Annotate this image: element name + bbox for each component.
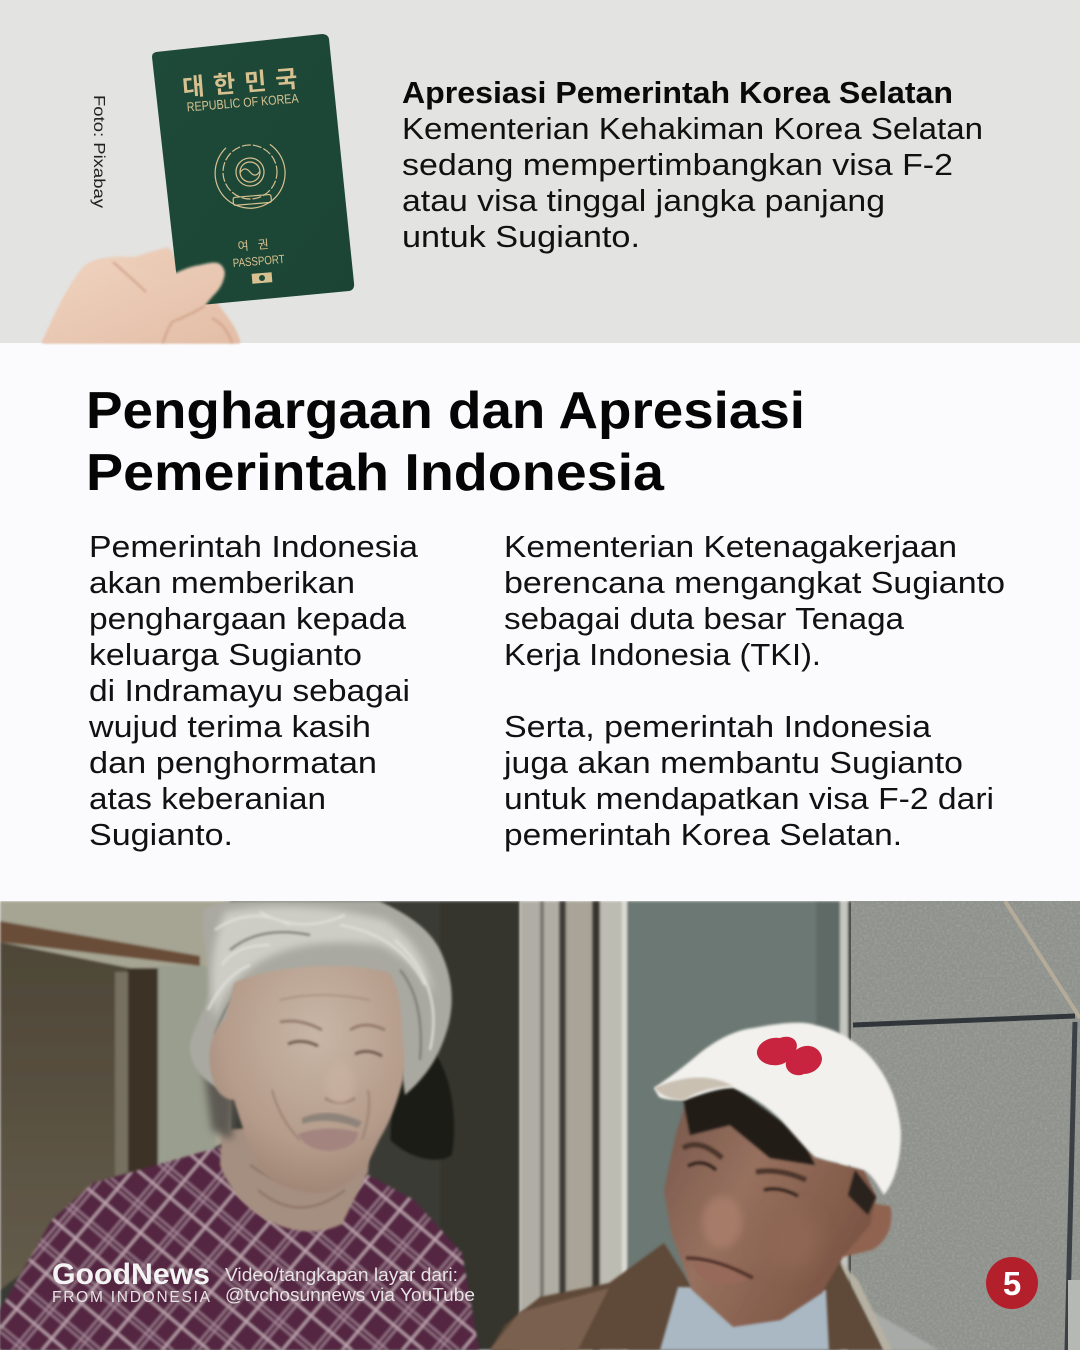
passport gold lettering	[181, 65, 307, 284]
text block: Korean government appreciation: untuk Sugianto.	[402, 219, 640, 254]
passport gold lettering: 여권	[237, 236, 278, 254]
text block: Korean government appreciation: atau visa tinggal jangka panjang	[402, 183, 885, 218]
text block: Korean government appreciation: sedang mempertimbangkan visa F-2	[402, 147, 953, 182]
logo: GoodNews from Indonesia: FROM INDONESIA	[52, 1289, 211, 1306]
hand fingers behind passport	[42, 247, 240, 343]
video credit: @tvchosunnews via YouTube	[225, 1285, 475, 1305]
lips	[712, 1264, 740, 1278]
face	[664, 1090, 876, 1327]
page number badge	[986, 1257, 1038, 1309]
video credit	[225, 1265, 475, 1305]
thumb and palm	[42, 260, 240, 343]
ear	[843, 1203, 891, 1257]
text block: right column: Kementerian Ketenagakerjaan	[504, 529, 957, 564]
woman	[0, 901, 479, 1350]
dark hair by the ear	[200, 1076, 237, 1142]
clover logo	[757, 1037, 822, 1075]
passport gold lettering: REPUBLIC OF KOREA	[186, 91, 299, 114]
text block: left column: keluarga Sugianto	[89, 637, 362, 672]
text block: right column: juga akan membantu Sugianto	[503, 745, 963, 780]
man	[490, 1023, 939, 1350]
shirt	[0, 1147, 479, 1350]
cap	[654, 1023, 901, 1195]
text block: Korean government appreciation: Apresiasi Pemerintah Korea Selatan	[402, 75, 953, 110]
text block: Korean government appreciation	[402, 75, 983, 254]
hair under cap	[683, 1086, 815, 1165]
text block: right column: berencana mengangkat Sugianto	[504, 565, 1005, 600]
text block: right column: sebagai duta besar Tenaga	[504, 601, 905, 636]
eyes, brows and mouth	[683, 1145, 806, 1278]
passport cover	[152, 34, 354, 307]
text block: Korean government appreciation: Kementerian Kehakiman Korea Selatan	[402, 111, 983, 146]
text block: right column: Kerja Indonesia (TKI).	[504, 637, 821, 672]
text block: right column: Serta, pemerintah Indonesia	[504, 709, 932, 744]
hair	[190, 901, 452, 1095]
text block: right column: untuk mendapatkan visa F-2 dari	[504, 781, 994, 816]
nose and cheek light	[702, 1196, 742, 1248]
heading: Penghargaan dan Apresiasi	[86, 382, 805, 440]
mouth	[298, 1128, 358, 1151]
text block: left column	[88, 529, 419, 852]
hand creases	[113, 262, 232, 343]
text block: left column: dan penghormatan	[89, 745, 377, 780]
text block: right column	[503, 529, 1005, 852]
text block: left column: di Indramayu sebagai	[89, 673, 410, 708]
photo: hand holding Korean passport	[42, 34, 354, 343]
text block: right column: pemerintah Korea Selatan.	[504, 817, 902, 852]
text block: left column: Pemerintah Indonesia	[89, 529, 419, 564]
jacket shoulder	[490, 1243, 884, 1350]
photo panel: elderly woman and Sugianto	[0, 901, 1080, 1350]
text block: left column: wujud terima kasih	[88, 709, 371, 744]
face	[210, 966, 404, 1193]
text block: left column: atas keberanian	[89, 781, 326, 816]
logo: GoodNews from Indonesia: GoodNews	[52, 1258, 210, 1291]
heading	[86, 382, 805, 502]
text block: left column: penghargaan kepada	[89, 601, 407, 636]
video credit: Video/tangkapan layar dari:	[225, 1265, 458, 1285]
heading: Pemerintah Indonesia	[86, 444, 665, 502]
grey jacket	[874, 1314, 936, 1350]
hair wisps	[208, 912, 433, 1050]
shirt collar	[660, 1287, 829, 1350]
logo: GoodNews from Indonesia	[52, 1258, 211, 1306]
text block: left column: akan memberikan	[89, 565, 355, 600]
neck	[220, 1120, 372, 1231]
photo credit: Foto: Pixabay	[90, 95, 107, 208]
background: wall and door	[0, 901, 520, 1350]
passport gold lettering: 대한민국	[181, 65, 307, 102]
passport gold lettering: PASSPORT	[232, 252, 286, 270]
background: stone wall	[851, 901, 1080, 1350]
page number badge: 5	[1003, 1265, 1021, 1302]
background: window frame and glass	[520, 901, 852, 1350]
panel: Korean government appreciation	[0, 0, 1080, 343]
text block: left column: Sugianto.	[89, 817, 233, 852]
nose highlight	[328, 1092, 352, 1106]
face features	[272, 995, 385, 1140]
